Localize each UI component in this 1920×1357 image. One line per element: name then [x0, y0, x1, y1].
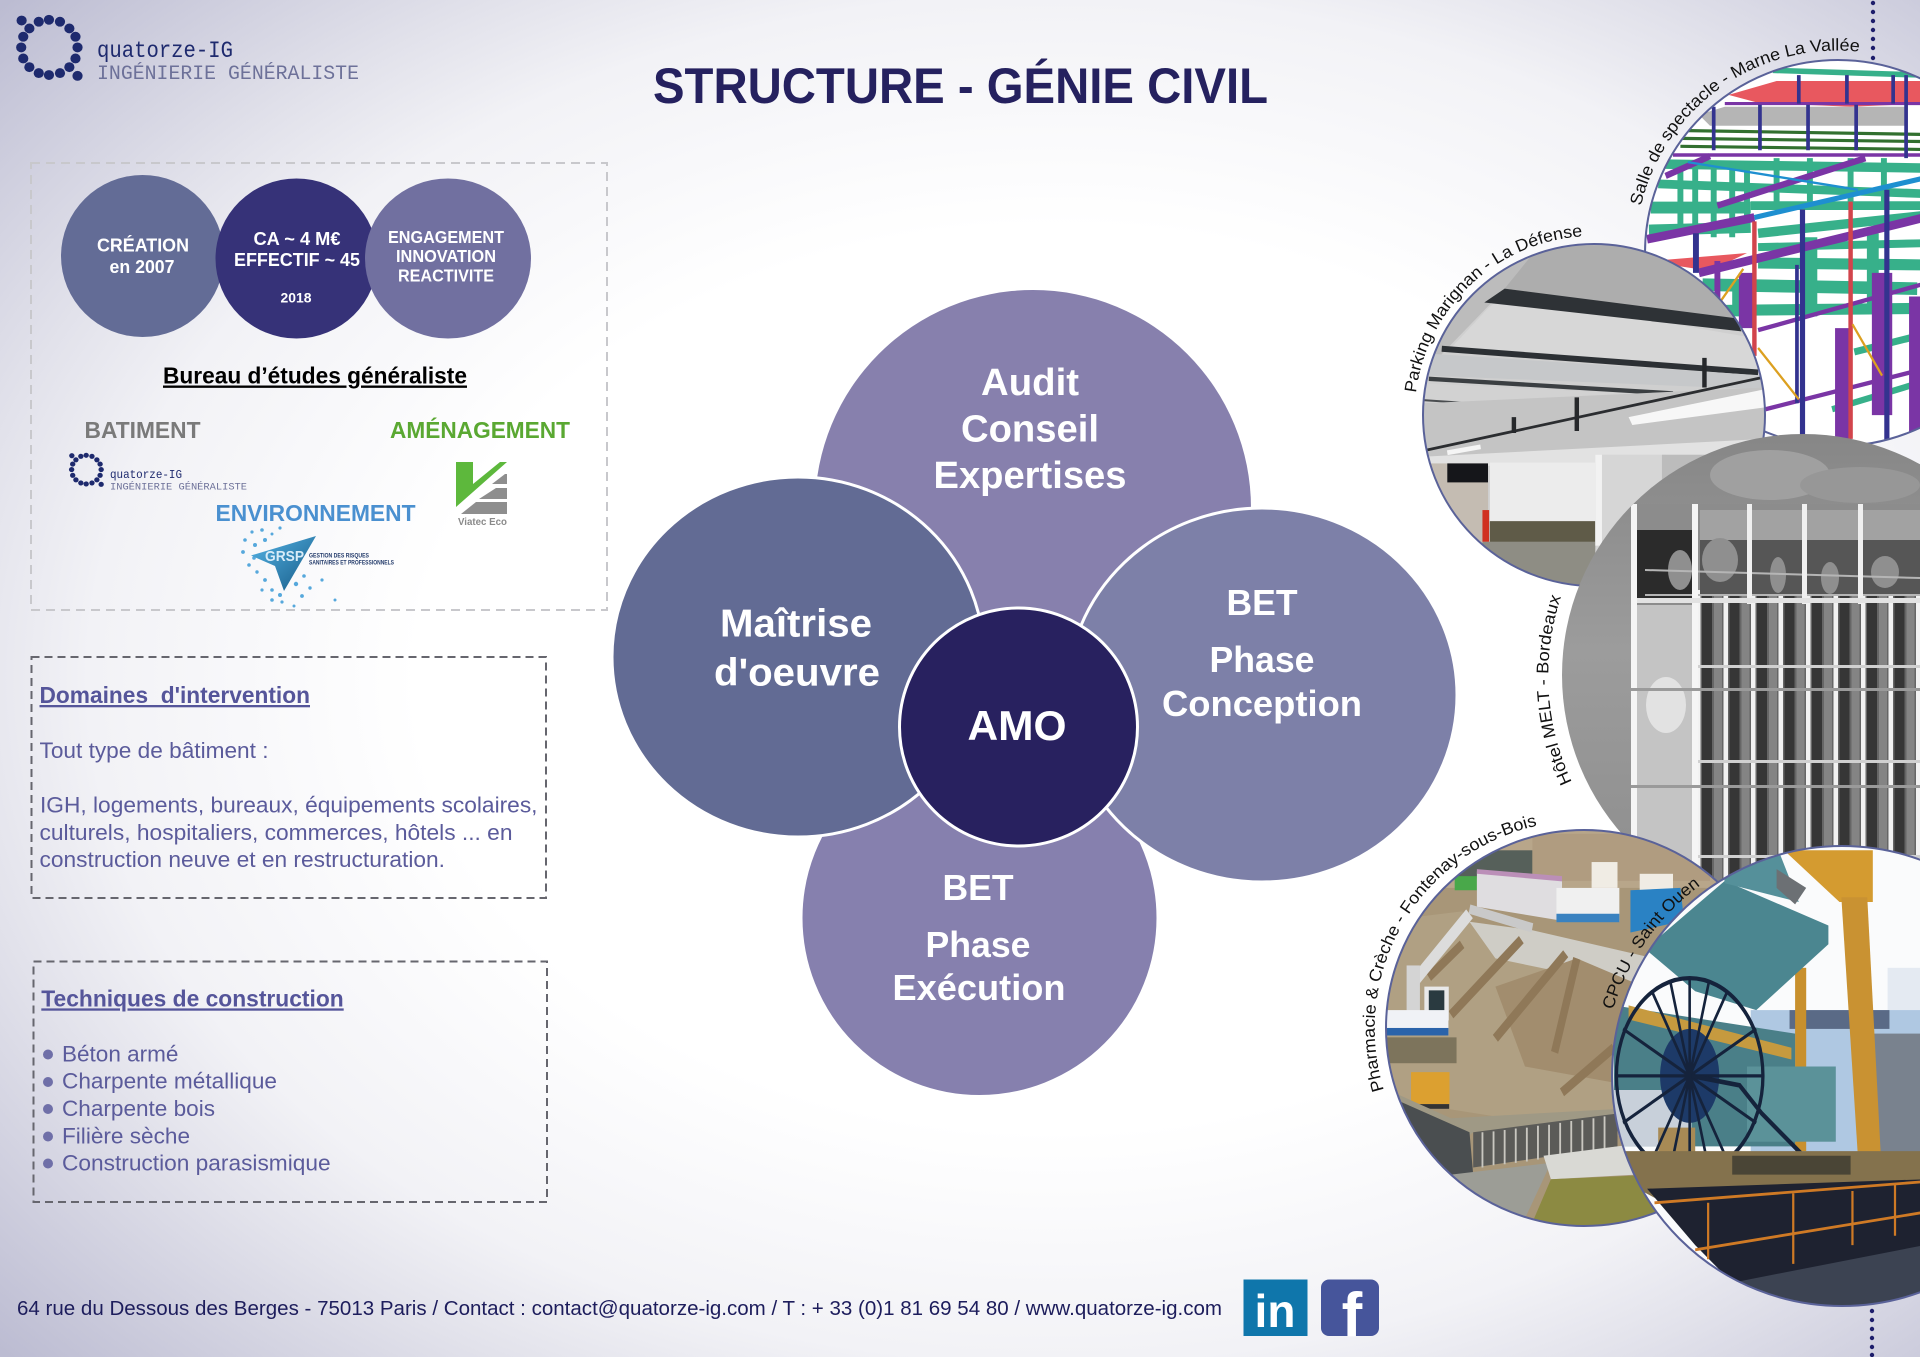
dotted line top [1871, 1, 1875, 60]
logo tagline: INGÉNIERIE GÉNÉRALISTE [97, 62, 359, 86]
circle: chiffres clés: EFFECTIF ~ 45 [234, 250, 360, 270]
text block: Tout type de bâtiment : [40, 738, 268, 763]
circle: chiffres clés [216, 178, 378, 338]
text block [40, 738, 538, 872]
logo: quatorze-IG small [69, 453, 247, 494]
bullet list: Charpente métallique [62, 1069, 277, 1094]
outline: parking Marignan [1423, 244, 1765, 586]
petal: audit [815, 290, 1251, 726]
outline: pharmacie et crèche [1386, 830, 1782, 1226]
photo: parking Marignan [1420, 240, 1770, 593]
label: environnement: ENVIRONNEMENT [216, 500, 416, 526]
bullet list: Construction parasismique [62, 1151, 331, 1176]
panel: company profile [31, 163, 607, 610]
logo: Viatec Eco [456, 462, 507, 528]
text block: culturels, hospitaliers, commerces, hôtels ... en [40, 820, 512, 845]
logo: GRSP: GESTION DES RISQUES [309, 552, 370, 560]
icon: LinkedIn: in [1255, 1285, 1295, 1337]
petal: audit: Conseil [961, 408, 1099, 450]
photo: hôtel MELT [1560, 430, 1920, 920]
logo: quatorze-IG small: quatorze-IG [110, 468, 182, 482]
logo: GRSP [241, 526, 395, 608]
heading: Domaines d'intervention [40, 682, 310, 708]
photo: pharmacie et crèche [1387, 831, 1716, 1225]
dotted line bottom [1870, 1309, 1874, 1357]
bullet list: Filière sèche [62, 1124, 190, 1149]
photo: CPCU Saint-Ouen [1610, 845, 1920, 1316]
label: batiment: BATIMENT [84, 417, 200, 443]
petal: audit: Audit [981, 362, 1079, 404]
petal: BET phase exécution: Exécution [892, 967, 1066, 1008]
label: CPCU: CPCU - Saint Ouen [1603, 880, 1700, 1008]
circle: création: CRÉATION [97, 234, 189, 256]
outline: salle de spectacle [1645, 60, 1920, 446]
circle: création: en 2007 [110, 257, 174, 277]
circle: valeurs: INNOVATION [396, 246, 496, 266]
circle: valeurs: REACTIVITE [398, 266, 494, 286]
circle: valeurs: ENGAGEMENT [388, 227, 504, 247]
logo: GRSP: GRSP [265, 548, 304, 565]
panel: techniques de construction [34, 962, 547, 1202]
heading: bureau d'études: Bureau d’études généraliste [163, 362, 467, 388]
panel: domaines d'intervention [32, 657, 546, 898]
bullet list: Béton armé [62, 1041, 178, 1066]
text block: IGH, logements, bureaux, équipements scolaires, [40, 792, 538, 818]
logo: quatorze-IG [16, 15, 359, 86]
icon: dotted ring [16, 15, 83, 81]
label: pharmacie: Pharmacie & Crèche - Fontenay-sous-Bois [1362, 816, 1536, 1092]
petal: BET phase conception: Conception [1162, 683, 1362, 724]
petal: maîtrise d'oeuvre: d'oeuvre [714, 652, 880, 694]
label: salle de spectacle: Salle de spectacle - Marne La Vallée [1630, 38, 1859, 204]
petal: maîtrise d'oeuvre: Maîtrise [720, 602, 872, 646]
center: AMO [900, 608, 1138, 846]
logo: GRSP: SANITAIRES ET PROFESSIONNELS [309, 560, 395, 566]
icon: Facebook [1321, 1280, 1379, 1350]
icon: LinkedIn [1244, 1280, 1308, 1337]
logo: quatorze-IG small: INGÉNIERIE GÉNÉRALISTE [110, 480, 247, 494]
logo name: quatorze-IG [97, 38, 233, 64]
petal: maîtrise d'oeuvre [612, 477, 984, 837]
petal: BET phase exécution: Phase [926, 924, 1030, 965]
petal: BET phase exécution: BET [942, 867, 1014, 908]
center: AMO: AMO [968, 702, 1066, 749]
photo: salle de spectacle [1640, 55, 1920, 455]
label: aménagement: AMÉNAGEMENT [390, 416, 570, 443]
bullet list [43, 1041, 331, 1176]
title: STRUCTURE - GÉNIE CIVIL [653, 58, 1268, 114]
bullet list: Charpente bois [62, 1096, 215, 1121]
label: parking: Parking Marignan - La Défense [1404, 228, 1582, 392]
outline: CPCU Saint-Ouen [1612, 846, 1920, 1306]
circle: création [61, 175, 224, 337]
circle: valeurs [365, 178, 531, 338]
petal: BET phase conception: Phase [1210, 639, 1314, 680]
icon: Facebook: f [1342, 1281, 1363, 1350]
footer: contact: 64 rue du Dessous des Berges - 75013 Paris / Contact : contact@quatorze-ig.com / T : + 33 (0)1 81 69 54 80 / www.quatorze-ig.com [17, 1298, 1222, 1320]
petal: audit: Expertises [934, 455, 1126, 497]
diagram: services petals [612, 290, 1457, 1096]
circle: chiffres clés: CA ~ 4 M€ [254, 229, 340, 249]
circle: chiffres clés: 2018 [280, 290, 312, 306]
text block: construction neuve et en restructuration. [40, 847, 445, 872]
petal: BET phase conception: BET [1226, 582, 1298, 623]
petal: BET phase exécution [802, 740, 1158, 1096]
logo: Viatec Eco: Viatec Eco [458, 517, 507, 528]
heading: Techniques de construction [41, 985, 344, 1011]
label: hôtel MELT: Hôtel MELT - Bordeaux [1536, 594, 1572, 786]
petal: BET phase conception [1067, 508, 1457, 882]
